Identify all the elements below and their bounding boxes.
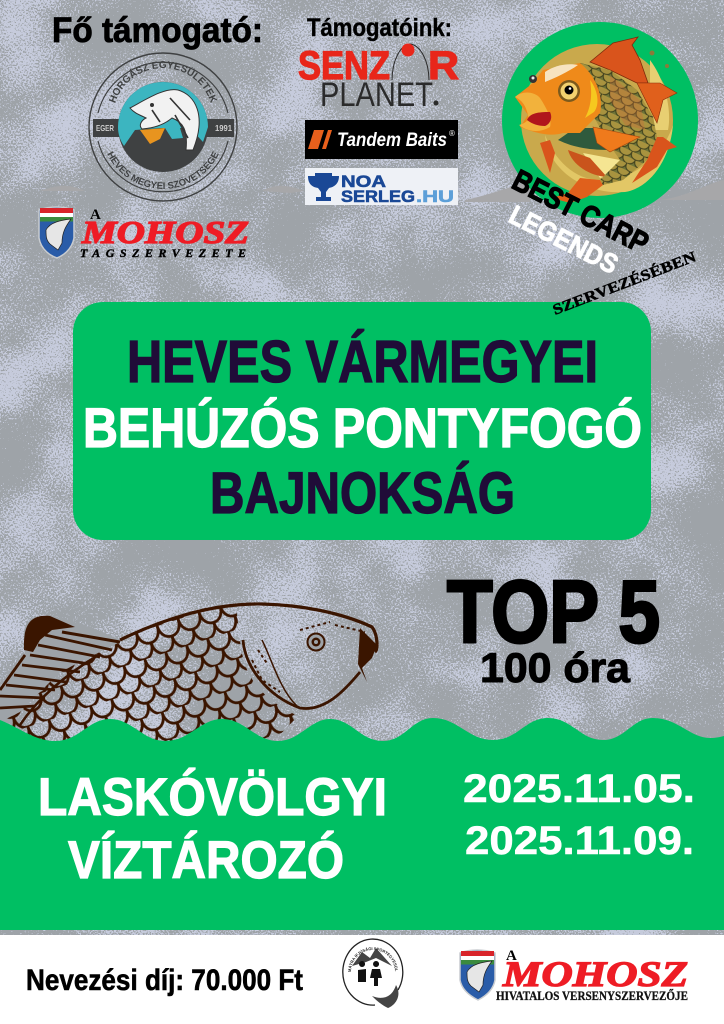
logo: Noa Serleg: NOA [341,172,386,191]
heading: Top 5: TOP 5 [447,562,660,661]
logo: Best Carp Legends carp badge [502,22,698,218]
title line 1: HEVES VÁRMEGYEI [127,329,598,395]
panel: green wave band [0,718,724,930]
logo: Horgász Egyesületek Heves Megyei Szövetsége [88,52,238,202]
carp head [515,63,601,135]
date: start: 2025.11.05. [463,767,695,811]
logo: Tandem Baits [305,120,458,159]
title line 2: BEHÚZÓS PONTYFOGÓ [83,396,642,459]
dorsal fin [590,37,648,83]
heading: main sponsor: Fő támogató: [52,11,263,50]
subheading: 100 hours: 100 óra [480,644,631,691]
title line 3: BAJNOKSÁG [210,461,515,526]
logo: Horgász Egyesületek Heves Megyei Szövetsége: EGER [96,123,114,133]
logo: MOHOSZ tagszervezete: A [90,207,101,223]
logo: Senzor Planet: PLANET [320,76,433,114]
logo: Tandem Baits: ® [449,129,455,138]
heading: supporters: Támogatóink: [307,14,452,42]
panel: championship title [73,302,651,540]
logo: MOHOSZ tagszervezete [39,207,249,260]
entry fee: Nevezési díj: 70.000 Ft [26,964,303,997]
logo: Tandem Baits: Tandem Baits [337,130,447,151]
logo: Noa Serleg: SERLEG [341,187,415,206]
logo: Senzor Planet: R [428,44,459,88]
logo: MOHOSZ official organiser: MOHOSZ [502,954,688,994]
logo: MOHOSZ official organiser: HIVATALOS VERSENYSZERVEZŐJE [496,988,688,1003]
logo: Mátra youth sport association [342,938,404,1008]
venue: line 1: LASKÓVÖLGYI [38,767,387,827]
logo: MOHOSZ tagszervezete: TAGSZERVEZETE [80,246,246,260]
logo: Horgász Egyesületek Heves Megyei Szövetsége: HORGÁSZ EGYESÜLETEK [108,61,218,104]
logo: Noa Serleg [305,168,458,206]
logo: MOHOSZ official organiser: A [506,948,517,964]
label: Best Carp: BEST CARP [507,164,654,260]
carp body [580,63,657,185]
logo: MOHOSZ tagszervezete: MOHOSZ [81,214,249,250]
label: organised by: SZERVEZÉSÉBEN [550,248,699,319]
logo: Horgász Egyesületek Heves Megyei Szövetsége: HEVES MEGYEI SZÖVETSÉGE [107,151,219,189]
logo: Senzor Planet: SENZ [298,44,390,88]
logo: MOHOSZ official organiser [460,948,688,1003]
date: end: 2025.11.09. [465,819,694,863]
illustration: engraved carp [0,600,377,750]
logo: Noa Serleg: .HU [416,187,454,206]
venue: line 2: VÍZTÁROZÓ [68,830,344,890]
label: Legends: LEGENDS [504,200,623,280]
logo: Horgász Egyesületek Heves Megyei Szövetsége: 1991 [215,123,232,133]
logo: Mátra youth sport association: MÁTRA IFJÚSÁGI SPORTEGYESÜLET [348,947,398,972]
logo: Senzor Planet [298,44,459,114]
